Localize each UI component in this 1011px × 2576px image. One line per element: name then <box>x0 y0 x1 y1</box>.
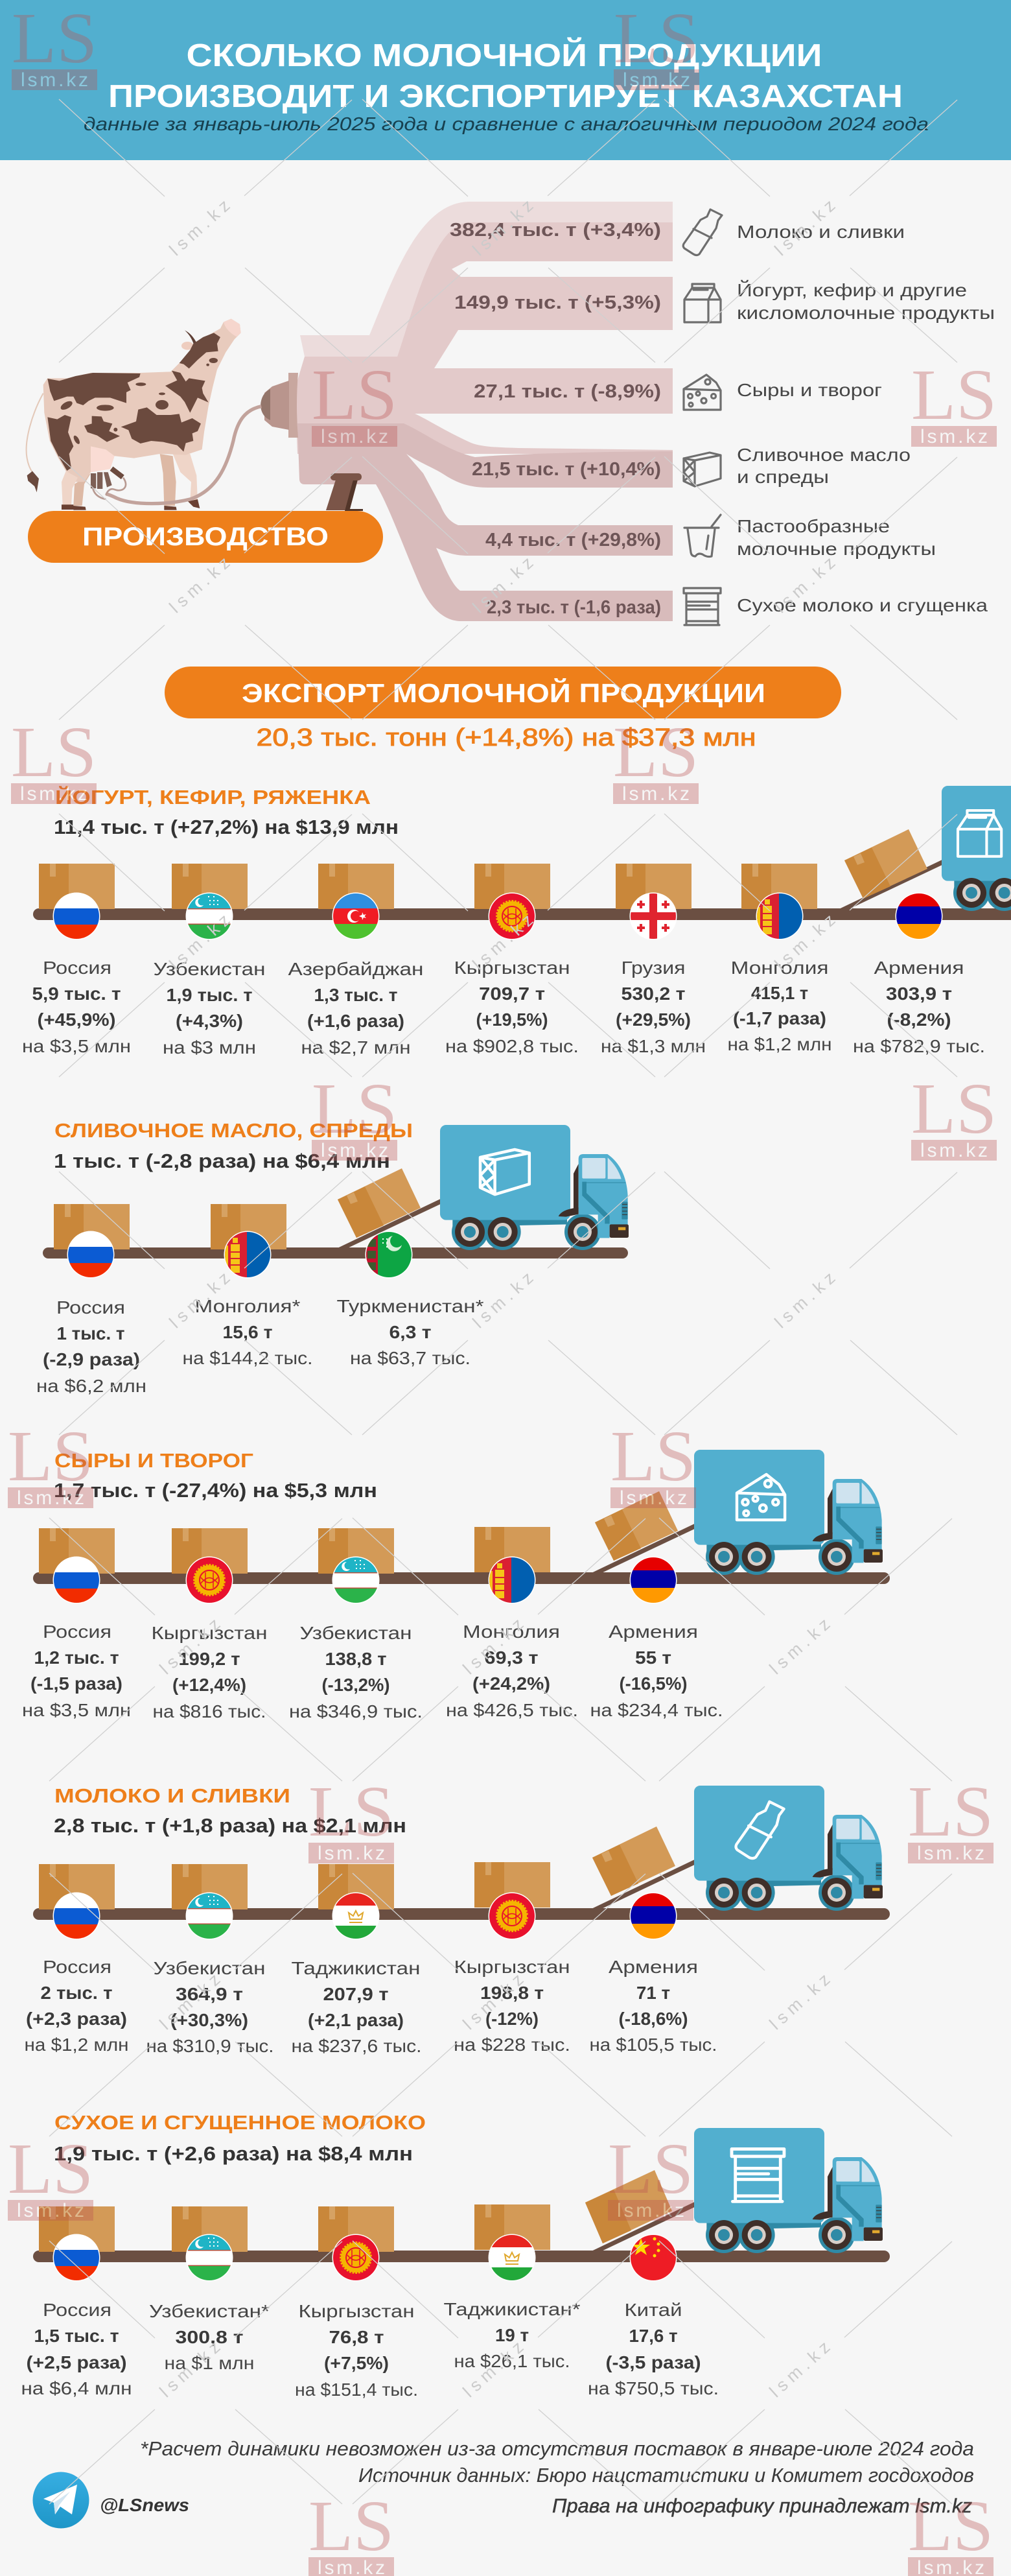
label: butter: и спреды <box>737 467 829 487</box>
country: Uzbekistan: (-13,2%) <box>321 1675 390 1695</box>
watermark: LS logos: lsm.kz <box>318 1843 385 1864</box>
badge: production <box>28 511 383 563</box>
country: Mongolia: Монголия <box>463 1622 560 1642</box>
country: Russia: 1,5 тыс. т <box>34 2326 119 2346</box>
panel: milk export <box>25 1784 890 2056</box>
country: Turkmenistan: 6,3 т <box>389 1322 432 1342</box>
watermark: LS logos: lsm.kz <box>617 2200 684 2221</box>
country: Russia: на $6,4 млн <box>21 2378 132 2398</box>
country: Kyrgyzstan: (-12%) <box>485 2009 539 2029</box>
watermark: LS logos: LS <box>308 1772 394 1852</box>
country: Armenia <box>590 1556 723 1720</box>
country: Russia <box>25 1864 128 2055</box>
country: Uzbekistan: 1,9 тыс. т <box>166 985 253 1005</box>
country: Kyrgyzstan <box>454 1862 570 2055</box>
watermark: LS logos: LS <box>12 0 97 78</box>
milk separator with branching pipes <box>261 202 673 621</box>
country: Russia: (+2,5 раза) <box>26 2352 127 2372</box>
watermark: LS logos: LS <box>908 2487 994 2566</box>
country: Kyrgyzstan: Кыргызстан <box>152 1623 267 1643</box>
country: Tajikistan: на $237,6 тыс. <box>292 2036 421 2056</box>
heading: ЙОГУРТ, КЕФИР, РЯЖЕНКА <box>55 785 371 809</box>
handle: @LSnews <box>100 2495 189 2515</box>
country: Kyrgyzstan: (+12,4%) <box>172 1675 246 1695</box>
watermark: LS logos: lsm.kz <box>920 426 988 447</box>
country: Armenia: Армения <box>874 958 964 978</box>
country: Russia <box>21 2206 132 2398</box>
country: Azerbaijan: Азербайджан <box>288 959 424 979</box>
truck <box>585 2128 883 2253</box>
country: Mongolia: (+24,2%) <box>472 1673 550 1694</box>
country: Kyrgyzstan: 76,8 т <box>329 2327 384 2347</box>
summary: 1,7 тыс. т (-27,4%) на $5,3 млн <box>54 1479 377 1502</box>
country: Mongolia <box>446 1527 578 1720</box>
country: Turkmenistan: на $63,7 тыс. <box>350 1348 471 1368</box>
country: Armenia: (-18,6%) <box>618 2009 688 2029</box>
watermark: LS logos: lsm.kz <box>917 1843 984 1864</box>
country: Uzbekistan: 364,9 т <box>176 1984 243 2004</box>
footnote and source: *Расчет динамики невозможен из-за отсутствия поставок в январе-июле 2024 года <box>140 2437 974 2460</box>
cow illustration <box>27 319 261 510</box>
watermark: LS logos: lsm.kz <box>622 783 690 805</box>
country: Uzbekistan: Узбекистан <box>299 1623 412 1643</box>
country: Mongolia: Монголия <box>731 958 828 978</box>
country: Russia: (+2,3 раза) <box>26 2009 127 2029</box>
watermark: LS logos: LS <box>11 713 97 792</box>
country: Russia: 5,9 тыс. т <box>32 984 121 1004</box>
badge: export: ЭКСПОРТ МОЛОЧНОЙ ПРОДУКЦИИ <box>242 678 765 708</box>
label: paste products: молочные продукты <box>737 539 936 559</box>
truck <box>841 786 1011 911</box>
country: Russia: (+45,9%) <box>38 1010 115 1030</box>
label: milk and cream: Молоко и сливки <box>737 222 905 242</box>
country: Tajikistan: 207,9 т <box>323 1984 389 2004</box>
watermark: LS logos: LS <box>8 2129 93 2209</box>
conveyor <box>33 1572 890 1584</box>
conveyor <box>33 908 1011 920</box>
country: Russia: (-1,5 раза) <box>30 1673 122 1694</box>
title <box>108 38 903 114</box>
country: Russia: на $6,2 млн <box>36 1376 146 1396</box>
icon: telegram <box>32 2472 89 2529</box>
country: Russia: на $3,5 млн <box>22 1700 131 1720</box>
country: Mongolia: 415,1 т <box>751 983 808 1003</box>
country: Kyrgyzstan: 199,2 т <box>179 1649 240 1669</box>
country: Tajikistan: Таджикистан* <box>443 2299 581 2319</box>
country: Kyrgyzstan <box>152 1528 267 1721</box>
country: Russia: 1,2 тыс. т <box>34 1648 119 1668</box>
summary: 11,4 тыс. т (+27,2%) на $13,9 млн <box>54 816 399 838</box>
country: Armenia <box>853 892 985 1056</box>
country: China <box>588 2234 719 2398</box>
values on pipes <box>450 220 661 618</box>
values on pipes: 149,9 тыс. т (+5,3%) <box>454 292 661 313</box>
watermark: LS logos: lsm.kz <box>321 1140 388 1161</box>
watermark: LS logos: LS <box>908 1772 994 1852</box>
heading: СЫРЫ И ТВОРОГ <box>54 1449 253 1472</box>
watermark lattice: lsm.kz <box>771 1268 839 1332</box>
values on pipes: 4,4 тыс. т (+29,8%) <box>485 530 661 550</box>
badge: export <box>165 667 841 718</box>
watermark lattice: lsm.kz <box>166 1268 233 1332</box>
country: Mongolia <box>727 864 832 1054</box>
summary: 1 тыс. т (-2,8 раза) на $6,4 млн <box>54 1150 390 1172</box>
watermark lattice: lsm.kz <box>459 1614 527 1678</box>
watermark lattice: lsm.kz <box>469 196 537 259</box>
values on pipes: 27,1 тыс. т (-8,9%) <box>474 381 661 402</box>
country: Tajikistan: Таджикистан <box>292 1958 420 1978</box>
country: Mongolia: на $1,2 млн <box>727 1034 832 1054</box>
panel: yogurt export <box>22 785 1011 1058</box>
country: Russia <box>36 1204 146 1396</box>
country: Turkmenistan <box>337 1231 484 1368</box>
label: paste products: Пастообразные <box>737 516 890 536</box>
heading: СЛИВОЧНОЕ МАСЛО, СПРЕДЫ <box>54 1119 413 1142</box>
country: China: 17,6 т <box>629 2326 678 2346</box>
country: Russia: Россия <box>43 2300 111 2320</box>
watermark: LS logos: LS <box>911 1069 997 1149</box>
watermark: LS logos: LS <box>613 713 699 792</box>
country: Georgia: Грузия <box>621 958 686 978</box>
country: Kyrgyzstan: на $902,8 тыс. <box>445 1036 579 1056</box>
country: Uzbekistan: на $346,9 тыс. <box>289 1701 423 1721</box>
country: Uzbekistan <box>153 864 266 1058</box>
country: Kyrgyzstan: (+19,5%) <box>476 1010 548 1030</box>
country: Mongolia: на $426,5 тыс. <box>446 1700 578 1720</box>
footnote and source: Источник данных: Бюро нацстатистики и Комитет госдоходов <box>358 2464 974 2487</box>
country: Mongolia <box>183 1204 312 1368</box>
country: Georgia <box>601 864 706 1056</box>
watermark lattice: lsm.kz <box>469 910 537 974</box>
country: Uzbekistan: на $1 млн <box>165 2353 254 2373</box>
country: China: (-3,5 раза) <box>605 2352 701 2372</box>
country: Kyrgyzstan: Кыргызстан <box>454 958 570 978</box>
country: Uzbekistan: на $3 млн <box>163 1037 256 1058</box>
watermark: LS logos: LS <box>312 1069 397 1149</box>
title: СКОЛЬКО МОЛОЧНОЙ ПРОДУКЦИИ <box>187 38 822 73</box>
label: yogurt and kefir: кисломолочные продукты <box>737 303 995 323</box>
watermark: LS logos: LS <box>312 355 397 435</box>
country: Armenia: 55 т <box>635 1648 671 1668</box>
watermark lattice: lsm.kz <box>156 1614 224 1678</box>
country: Kyrgyzstan: Кыргызстан <box>298 2301 415 2321</box>
watermark lattice: lsm.kz <box>459 1970 527 2033</box>
country: Uzbekistan: Узбекистан <box>153 959 266 979</box>
export total: 20,3 тыс. тонн (+14,8%) на $37,3 млн <box>257 724 756 751</box>
country: Uzbekistan: 138,8 т <box>325 1649 386 1669</box>
country: Russia: (-2,9 раза) <box>43 1349 140 1369</box>
watermark: LS logos: lsm.kz <box>20 783 87 805</box>
footnote and source: Права на инфографику принадлежат lsm.kz <box>552 2494 972 2517</box>
country: Armenia: 71 т <box>636 1983 670 2003</box>
label: yogurt and kefir: Йогурт, кефир и другие <box>737 280 967 300</box>
watermark: LS logos: LS <box>614 0 699 78</box>
subtitle: данные за январь-июль 2025 года и сравнение с аналогичным периодом 2024 года <box>84 114 929 135</box>
label: cheese: Сыры и творог <box>737 380 882 400</box>
country: Russia: Россия <box>43 958 111 978</box>
country: Mongolia: 15,6 т <box>223 1322 272 1342</box>
country: Russia: Россия <box>56 1297 125 1318</box>
values on pipes: 2,3 тыс. т (-1,6 раза) <box>487 597 661 618</box>
watermark lattice: lsm.kz <box>166 910 233 974</box>
country: Tajikistan <box>292 1864 421 2056</box>
country: Uzbekistan: Узбекистан <box>153 1958 266 1978</box>
watermark: LS logos: LS <box>608 2129 693 2209</box>
country: Armenia: Армения <box>609 1622 698 1642</box>
watermark lattice: lsm.kz <box>469 553 537 617</box>
country: Turkmenistan: Туркменистан* <box>337 1296 484 1316</box>
label: paste products <box>737 516 936 559</box>
country: Uzbekistan: 300,8 т <box>175 2327 244 2347</box>
watermark: LS logos: lsm.kz <box>21 69 88 91</box>
panel: production diagram <box>27 202 995 625</box>
watermark lattice: lsm.kz <box>766 2337 833 2401</box>
watermark: LS logos: lsm.kz <box>620 1487 687 1509</box>
country: Kyrgyzstan: на $151,4 тыс. <box>295 2380 418 2400</box>
title: ПРОИЗВОДИТ И ЭКСПОРТИРУЕТ КАЗАХСТАН <box>108 79 903 114</box>
country: Russia: 2 тыс. т <box>40 1983 113 2003</box>
watermark lattice: lsm.kz <box>156 2337 224 2401</box>
conveyor <box>33 1908 890 1920</box>
country: Armenia: (-8,2%) <box>887 1010 951 1030</box>
country: Armenia: на $234,4 тыс. <box>590 1700 723 1720</box>
header banner <box>0 0 1011 160</box>
watermark lattice: lsm.kz <box>771 910 839 974</box>
milking hose <box>106 407 261 504</box>
watermark lattice: lsm.kz <box>766 1970 833 2033</box>
country: Tajikistan <box>443 2204 581 2371</box>
heading: МОЛОКО И СЛИВКИ <box>54 1784 290 1807</box>
icon: yogurt cup <box>684 515 721 557</box>
country: Uzbekistan <box>146 1864 273 2056</box>
summary: 1,9 тыс. т (+2,6 раза) на $8,4 млн <box>54 2142 413 2165</box>
watermark lattice: lsm.kz <box>166 553 233 617</box>
country: Azerbaijan: 1,3 тыс. т <box>314 985 398 1005</box>
watermark: LS logos: lsm.kz <box>17 1487 84 1509</box>
country: Uzbekistan: (+4,3%) <box>176 1011 243 1031</box>
country: Armenia: Армения <box>609 1957 698 1977</box>
watermark lattice: lsm.kz <box>166 196 233 259</box>
country: Kyrgyzstan: на $228 тыс. <box>454 2035 570 2055</box>
conveyor <box>33 2251 890 2262</box>
country: Kyrgyzstan: 198,8 т <box>480 1983 544 2003</box>
country: Tajikistan: 19 т <box>495 2325 529 2345</box>
icon: butter <box>684 453 721 486</box>
icon: can <box>684 588 721 625</box>
country: Azerbaijan <box>288 864 424 1058</box>
conveyor <box>43 1247 628 1258</box>
panel: butter export <box>36 1119 629 1396</box>
watermark: LS logos: LS <box>308 2487 394 2566</box>
watermark: LS logos: LS <box>8 1417 93 1496</box>
summary: 2,8 тыс. т (+1,8 раза) на $2,1 млн <box>54 1814 406 1837</box>
label: dry milk: Сухое молоко и сгущенка <box>737 595 988 615</box>
footnote and source <box>140 2437 974 2517</box>
country: Uzbekistan: (+30,3%) <box>170 2010 248 2030</box>
watermark lattice: lsm.kz <box>156 1970 224 2033</box>
country: Azerbaijan: на $2,7 млн <box>301 1037 411 1058</box>
country: Tajikistan: на $26,1 тыс. <box>454 2351 570 2371</box>
truck <box>593 1450 883 1575</box>
country: Kyrgyzstan: Кыргызстан <box>454 1957 570 1977</box>
country: Armenia: (-16,5%) <box>620 1673 687 1694</box>
watermark lattice: lsm.kz <box>771 553 839 617</box>
country: Uzbekistan <box>289 1528 423 1721</box>
country: Georgia: 530,2 т <box>621 984 686 1004</box>
country: Armenia <box>590 1892 717 2055</box>
badge: production: ПРОИЗВОДСТВО <box>82 523 329 551</box>
values on pipes: 21,5 тыс. т (+10,4%) <box>472 459 661 480</box>
country: Kyrgyzstan: на $816 тыс. <box>153 1701 266 1721</box>
country: Russia: на $1,2 млн <box>25 2035 128 2055</box>
country: Kyrgyzstan <box>445 864 579 1056</box>
country: Mongolia: (-1,7 раза) <box>733 1008 826 1028</box>
country: Georgia: на $1,3 млн <box>601 1036 706 1056</box>
icon: carton <box>684 284 721 322</box>
watermark lattice: lsm.kz <box>469 1268 537 1332</box>
watermark lattice: lsm.kz <box>459 2337 527 2401</box>
label: butter: Сливочное масло <box>737 445 911 465</box>
values on pipes: 382,4 тыс. т (+3,4%) <box>450 220 661 241</box>
country: Armenia: на $105,5 тыс. <box>590 2035 717 2055</box>
country: Russia: Россия <box>43 1622 111 1642</box>
watermark: LS logos: lsm.kz <box>623 69 690 91</box>
heading: СУХОЕ И СГУЩЕННОЕ МОЛОКО <box>54 2111 426 2134</box>
watermark: LS logos: LS <box>911 355 997 435</box>
watermark lattice: lsm.kz <box>766 1614 833 1678</box>
country: Russia <box>22 864 131 1056</box>
watermark: LS logos: lsm.kz <box>17 2200 84 2221</box>
country: Kyrgyzstan <box>295 2206 418 2400</box>
panel: dry milk export <box>21 2111 890 2400</box>
country: Mongolia: на $144,2 тыс. <box>183 1348 312 1368</box>
country: Uzbekistan: Узбекистан* <box>149 2301 270 2321</box>
country: Mongolia: Монголия* <box>194 1296 301 1316</box>
watermark lattice: lsm.kz <box>771 196 839 259</box>
watermark: LS logos: lsm.kz <box>321 426 388 447</box>
icon: cheese <box>684 375 721 410</box>
country: Armenia: на $782,9 тыс. <box>853 1036 985 1056</box>
country: Kyrgyzstan: (+7,5%) <box>324 2353 389 2373</box>
panel: cheese export <box>22 1449 890 1721</box>
country: Russia <box>22 1528 131 1720</box>
watermark: LS logos: lsm.kz <box>920 1140 988 1161</box>
icon: milk bottle <box>683 209 722 255</box>
country: Armenia: 303,9 т <box>886 984 952 1004</box>
country: Tajikistan: (+2,1 раза) <box>308 2010 404 2030</box>
truck <box>338 1125 629 1250</box>
country: Russia: Россия <box>43 1957 111 1977</box>
country: Uzbekistan <box>149 2206 270 2373</box>
country: China: на $750,5 тыс. <box>588 2378 719 2398</box>
country: Georgia: (+29,5%) <box>616 1010 691 1030</box>
country: Russia: 1 тыс. т <box>57 1323 124 1343</box>
label: butter <box>737 445 911 487</box>
stand <box>326 473 363 511</box>
watermark: LS logos: LS <box>610 1417 696 1496</box>
country: Russia: на $3,5 млн <box>22 1036 131 1056</box>
country: Mongolia: 69,3 т <box>485 1648 538 1668</box>
country: China: Китай <box>625 2300 682 2320</box>
country: Uzbekistan: на $310,9 тыс. <box>146 2036 273 2056</box>
country: Azerbaijan: (+1,6 раза) <box>307 1011 404 1031</box>
country: Kyrgyzstan: 709,7 т <box>479 984 545 1004</box>
truck <box>592 1786 883 1911</box>
label: yogurt and kefir <box>737 280 995 323</box>
